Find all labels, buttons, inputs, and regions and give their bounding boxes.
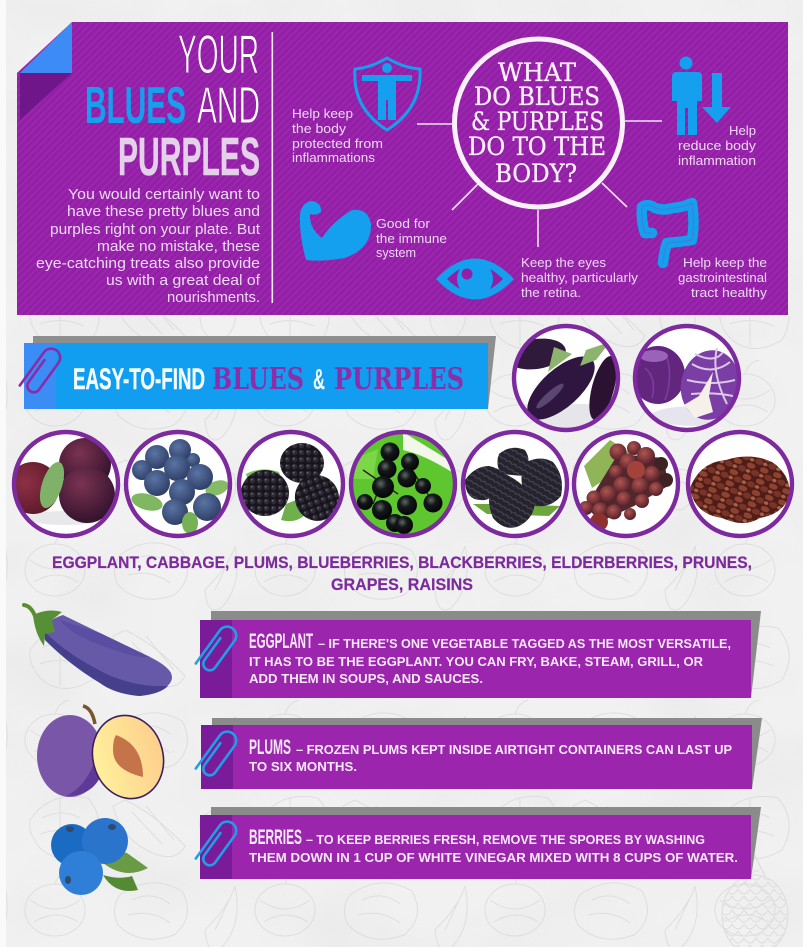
title: BLUES	[85, 77, 186, 135]
illustration: berries	[51, 818, 148, 895]
text: gastrointestinal: Help keep the	[683, 256, 767, 270]
central circle question: WHAT	[498, 58, 576, 87]
title: PURPLES	[118, 127, 260, 187]
tip bar: berries	[196, 807, 761, 879]
illustration: eggplant	[24, 605, 172, 696]
banner heading	[73, 362, 464, 397]
folded corner	[20, 22, 72, 120]
text: eyes	[521, 256, 639, 300]
photo: blueberries	[126, 432, 231, 536]
tip bar: eggplant	[196, 611, 761, 698]
connector lines	[417, 121, 662, 247]
title	[85, 23, 260, 187]
tip text: BERRIES	[249, 826, 302, 849]
intro paragraph: nourishments.	[167, 290, 260, 306]
text: immune system: Good for	[376, 217, 430, 231]
tip text: TO SIX MONTHS.	[249, 759, 357, 774]
text: eyes: the retina.	[521, 286, 581, 300]
tip text: ADD THEM IN SOUPS, AND SAUCES.	[249, 671, 483, 686]
text: gastrointestinal: tract healthy	[691, 286, 768, 300]
intro paragraph: purples right on your plate. But	[50, 222, 260, 238]
text: protect from inflammation: inflammations	[292, 151, 375, 165]
banner heading: PURPLES	[334, 362, 464, 397]
tip text: EGGPLANT	[249, 630, 313, 653]
banner heading: BLUES	[212, 362, 304, 397]
icon: paperclip	[196, 623, 240, 674]
tip bar: plums	[196, 718, 762, 789]
icon: person with down arrow	[672, 56, 731, 135]
tip text: – IF THERE'S ONE VEGETABLE TAGGED AS THE MOST VERSATILE,	[318, 636, 731, 651]
text: protect from inflammation	[292, 107, 383, 165]
text: immune system: the immune	[376, 232, 447, 246]
intro paragraph: You would certainly want to	[68, 187, 260, 203]
tip text: – FROZEN PLUMS KEPT INSIDE AIRTIGHT CONTAINERS CAN LAST UP	[296, 742, 732, 757]
tip text	[249, 826, 738, 865]
text: eyes: healthy, particularly	[521, 271, 639, 285]
text: protect from inflammation: Help keep	[292, 107, 353, 121]
caption: list of foods: EGGPLANT, CABBAGE, PLUMS, BLUEBERRIES, BLACKBERRIES, ELDERBERRIES, PRUNES,	[52, 553, 752, 572]
central circle question: DO TO THE	[468, 132, 606, 161]
tip text	[249, 630, 731, 686]
title: AND	[197, 77, 260, 135]
photo: red cabbage	[631, 326, 746, 430]
intro paragraph: eye-catching treats also provide	[36, 256, 260, 272]
intro paragraph: us with a great deal of	[106, 273, 261, 289]
text: gastrointestinal: gastrointestinal	[678, 271, 767, 285]
photo: elderberries	[351, 432, 455, 536]
photo: plums	[7, 432, 118, 536]
icon: paperclip	[196, 818, 240, 869]
banner heading: &	[313, 364, 325, 396]
central circle question: & PURPLES	[471, 107, 604, 136]
photo: blackberries	[239, 432, 346, 536]
text: reduce inflammation: inflammation	[678, 154, 756, 168]
photo: prunes	[463, 432, 567, 536]
text: reduce inflammation: Help	[729, 124, 756, 138]
intro paragraph: have these pretty blues and	[67, 204, 260, 220]
text: gastrointestinal	[678, 256, 768, 300]
banner heading: EASY-TO-FIND	[73, 363, 205, 396]
text: protect from inflammation: protected from	[292, 137, 383, 151]
panel: what blues and purples do	[17, 22, 788, 315]
caption: list of foods	[52, 553, 752, 594]
photo: eggplant	[504, 326, 622, 432]
icon: eye	[436, 258, 514, 300]
title: YOUR	[178, 23, 259, 85]
text: reduce inflammation	[678, 124, 757, 168]
tip text: PLUMS	[249, 736, 291, 759]
icon: paperclip	[196, 728, 240, 779]
caption: list of foods: GRAPES, RAISINS	[331, 575, 473, 594]
central circle question	[454, 39, 622, 207]
illustration: plum	[37, 706, 173, 807]
icon: intestine	[642, 203, 694, 263]
intro paragraph	[36, 187, 261, 306]
text: immune system	[376, 217, 447, 260]
text: eyes: Keep the eyes	[521, 256, 606, 270]
tip text: THEM DOWN IN 1 CUP OF WHITE VINEGAR MIXED WITH 8 CUPS OF WATER.	[249, 850, 738, 865]
tip text: IT HAS TO BE THE EGGPLANT. YOU CAN FRY, BAKE, STEAM, GRILL, OR	[249, 654, 704, 669]
intro paragraph: make no mistake, these	[97, 239, 260, 255]
central circle question: BODY?	[495, 159, 577, 188]
icon: flexed arm	[300, 201, 371, 261]
tip text	[249, 736, 732, 774]
icon: paperclip	[20, 345, 64, 396]
banner: easy to find	[20, 336, 496, 409]
tip text: – TO KEEP BERRIES FRESH, REMOVE THE SPORES BY WASHING	[306, 832, 705, 847]
text: protect from inflammation: the body	[292, 122, 347, 136]
photo: grapes	[574, 432, 678, 536]
icon: shield with person	[355, 58, 420, 130]
central circle question: DO BLUES	[474, 82, 600, 111]
text: reduce inflammation: reduce body	[678, 139, 757, 153]
text: immune system: system	[376, 246, 416, 260]
photo: raisins	[688, 432, 792, 536]
